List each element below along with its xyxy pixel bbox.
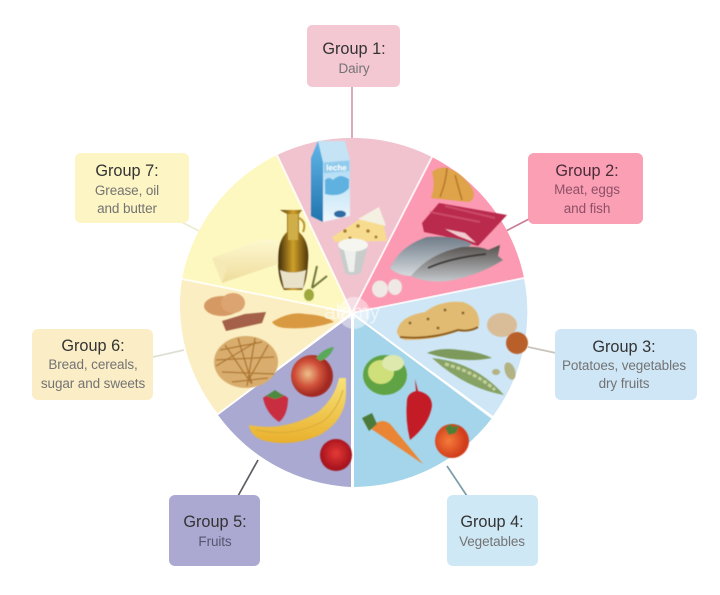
wedge: dairy: [277, 138, 432, 313]
icon: noodles: [214, 336, 278, 388]
icon: chicken: [431, 168, 474, 202]
icon: fish: [390, 237, 503, 281]
label: group 6: Group 6:: [61, 337, 125, 355]
icon: red pepper: [406, 379, 432, 440]
label: group 7: [75, 153, 189, 223]
label: group 4: Group 4:: [460, 513, 524, 531]
label: group 3: Potatoes, vegetables: [562, 358, 686, 373]
icon: yogurt cup: [338, 238, 368, 275]
icon: strawberry: [263, 390, 288, 422]
label: group 3: dry fruits: [599, 376, 650, 391]
wedge: meat: [352, 157, 524, 313]
icon: pea pods: [427, 349, 518, 395]
wedge: grease: [182, 155, 352, 313]
wedge: potatoes: [352, 278, 527, 416]
icon: red meat: [422, 203, 507, 246]
label: group 5: [169, 495, 260, 566]
icon: butter: [212, 239, 278, 283]
label: group 1: Dairy: [338, 61, 370, 76]
label: group 1: [307, 25, 400, 87]
label: group 2: and fish: [564, 201, 610, 216]
label: group 6: sugar and sweets: [41, 376, 145, 391]
icon: banana: [249, 378, 346, 443]
label: group 6: [32, 329, 153, 400]
label: group 5: Fruits: [198, 534, 232, 549]
connector lines: [153, 87, 556, 496]
icon: red apple small: [320, 439, 352, 471]
icon: oil bottle: [278, 210, 308, 290]
icon: apple large: [291, 347, 334, 397]
label: group 6: Bread, cereals,: [48, 357, 138, 372]
label: group 5: Group 5:: [183, 513, 247, 531]
label: group 7: Group 7:: [95, 162, 159, 180]
icon: cheese: [332, 207, 387, 242]
label: group 3: Group 3:: [592, 338, 656, 356]
icon: carrot: [362, 413, 423, 464]
wedge: bread: [180, 279, 352, 414]
watermark: alamy: [324, 301, 381, 324]
wedge: vegetables: [354, 316, 492, 487]
label: group 1: Group 1:: [322, 40, 386, 58]
label: group 2: Group 2:: [555, 162, 619, 180]
label: group 2: Meat, eggs: [554, 182, 620, 197]
label: group 2: [528, 153, 643, 224]
label: group 4: [447, 495, 538, 566]
icon: milk carton: leche: [326, 164, 347, 172]
pie chart: [180, 138, 527, 487]
icon: bread: [272, 313, 334, 328]
label: group 7: Grease, oil: [95, 183, 159, 198]
icon: potatoes: [397, 302, 479, 340]
icon: eggs: [372, 279, 402, 298]
label: group 3: [555, 329, 697, 400]
icon: olives: [304, 266, 327, 301]
icon: cabbage: [363, 355, 407, 395]
label: group 7: and butter: [97, 201, 158, 216]
icon: milk carton: [311, 141, 350, 222]
wedge: fruits: [218, 316, 351, 487]
icon: nuts: [487, 313, 528, 354]
icon: pastry: [204, 293, 266, 331]
icon: tomato: [435, 424, 469, 458]
label: group 4: Vegetables: [459, 534, 525, 549]
